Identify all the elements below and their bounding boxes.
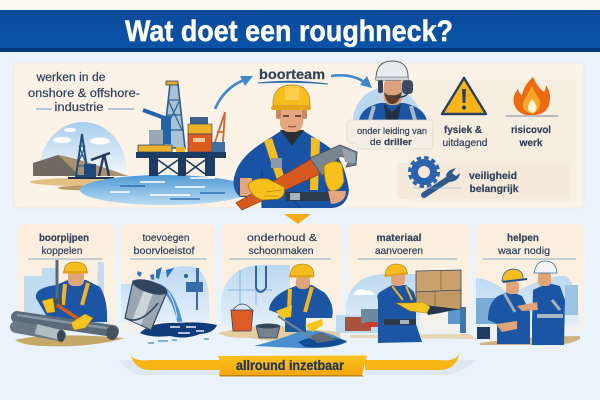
label: koppelen <box>42 245 83 257</box>
text: risicovol werk: risicovol <box>511 124 551 136</box>
caption: onder leiding van de driller <box>347 120 433 149</box>
pointer triangle <box>284 214 311 224</box>
panel: boorpijpen koppelen <box>15 224 125 346</box>
caption: onder leiding van de driller: onder leiding van <box>357 126 427 136</box>
text: werken in de industrie: onshore & offshore- <box>28 88 140 100</box>
label <box>28 232 102 259</box>
label: boorpijpen <box>39 232 89 244</box>
label <box>358 232 457 259</box>
panel: helpen waar nodig <box>476 224 583 345</box>
text: fysiek en uitdagend <box>442 124 488 149</box>
text: risicovol werk <box>511 124 551 149</box>
label: allround inzetbaar <box>236 358 345 373</box>
illustration: worker cleaning <box>218 264 347 348</box>
panel: context <box>14 61 584 210</box>
title: Wat doet een roughneck? <box>125 15 453 48</box>
panel: onderhoud en schoonmaken <box>218 224 347 348</box>
header banner <box>0 10 600 52</box>
label: aanvoeren <box>375 245 423 257</box>
label <box>229 232 331 259</box>
text: fysiek en uitdagend: uitdagend <box>442 137 488 149</box>
text: veiligheid belangrijk: veiligheid <box>469 170 517 182</box>
panel: toevoegen boorvloeistof <box>121 224 217 343</box>
icon: gear and wrench <box>410 158 461 195</box>
illustration: workers helping each other <box>476 261 580 345</box>
banner: allround inzetbaar <box>119 352 476 376</box>
text: werken in de industrie: werken in de <box>35 72 106 84</box>
illustration: bucket pouring fluid <box>121 266 217 343</box>
panel: materiaal aanvoeren <box>336 224 475 343</box>
text: werken in de industrie: industrie <box>54 102 104 114</box>
illustration: worker carrying boxes <box>336 264 475 343</box>
icon: warning triangle <box>442 78 486 114</box>
text: fysiek en uitdagend: fysiek & <box>444 124 482 136</box>
icon: fire <box>506 77 558 116</box>
arrow: to driller <box>331 75 372 88</box>
label: toevoegen <box>142 232 190 244</box>
illustration: worker coupling pipes <box>15 260 125 346</box>
illustration: onshore site <box>30 122 140 190</box>
label: schoonmaken <box>248 245 314 257</box>
text: risicovol werk: werk <box>519 137 543 149</box>
heading: boorteam: boorteam <box>259 67 325 82</box>
label: boorvloeistof <box>134 245 195 257</box>
illustration: driller <box>353 61 427 121</box>
text: veiligheid belangrijk <box>469 170 519 195</box>
label: materiaal <box>376 232 422 244</box>
illustration: water <box>80 175 250 205</box>
caption: onder leiding van de driller: de driller <box>370 137 412 148</box>
callout: veiligheid belangrijk <box>397 158 570 199</box>
illustration: offshore platform <box>136 81 226 176</box>
label <box>130 232 207 259</box>
text: werken in de industrie <box>28 72 140 114</box>
illustration: main roughneck with pipe wrench <box>234 85 357 210</box>
label <box>483 232 576 259</box>
wrench <box>236 145 357 210</box>
arrow: to boorteam <box>215 76 253 109</box>
ribbon shadow <box>119 360 476 375</box>
label: helpen <box>507 232 539 244</box>
text: veiligheid belangrijk: belangrijk <box>470 183 519 195</box>
ribbon tails <box>130 352 460 370</box>
label: waar nodig <box>497 245 550 257</box>
label: onderhoud & <box>247 232 317 244</box>
